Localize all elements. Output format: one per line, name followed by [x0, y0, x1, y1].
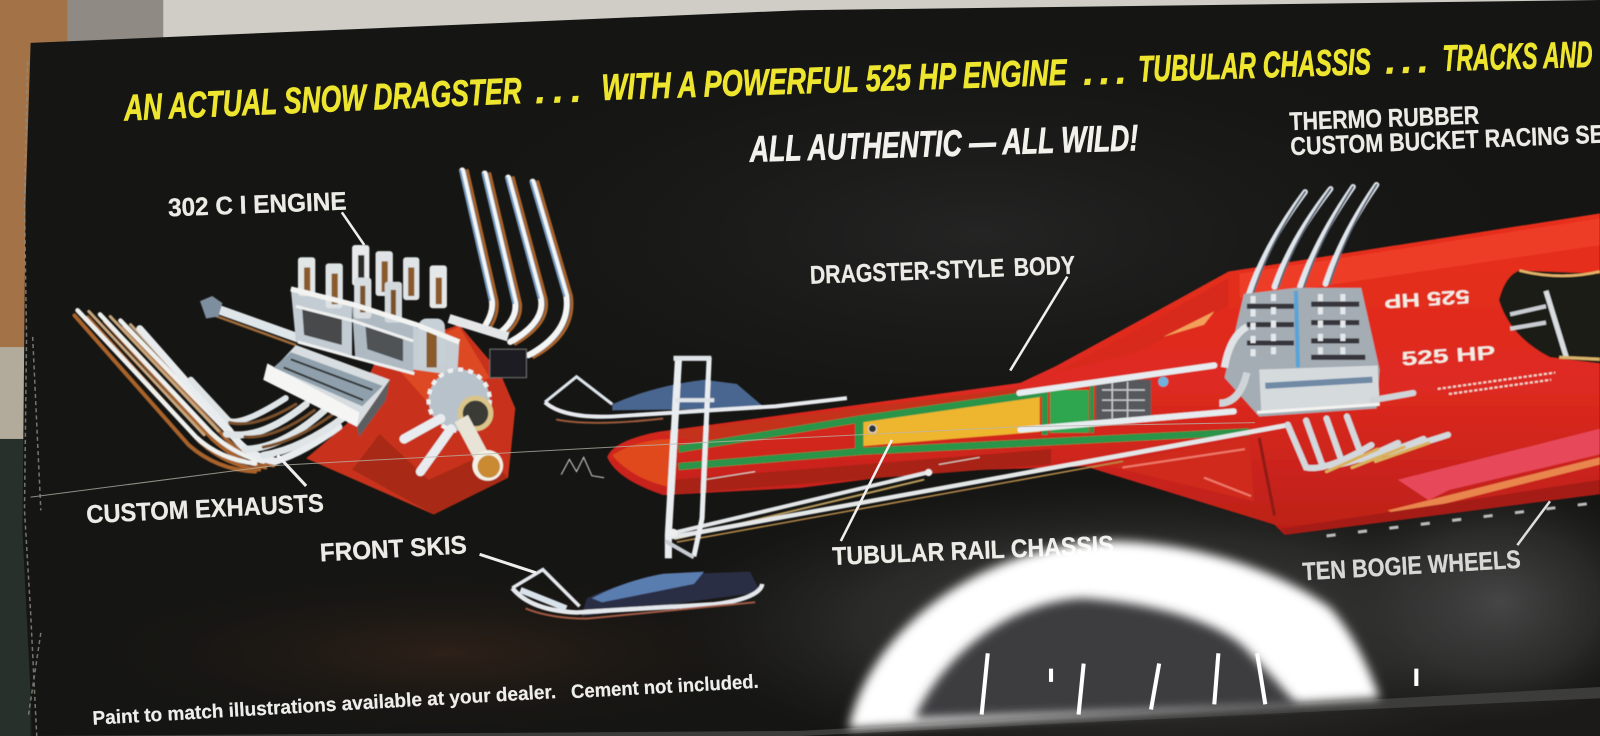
body decals	[1383, 285, 1555, 394]
pulley and accessories	[404, 370, 503, 481]
rear ski	[545, 377, 847, 423]
cockpit	[1499, 271, 1600, 363]
yellow deck	[863, 395, 1040, 446]
left edge creases	[24, 61, 41, 736]
label: chassis	[832, 440, 1114, 571]
label: engine: 302 C I ENGINE	[168, 188, 347, 222]
body decals: 525 HP	[1401, 342, 1496, 370]
headline yellow: . . .	[1385, 39, 1429, 81]
footnote	[92, 671, 759, 730]
bottom edge of the box	[33, 687, 1600, 736]
label: exhausts: CUSTOM EXHAUSTS	[86, 490, 324, 529]
front axle struts	[665, 357, 714, 558]
label: seat: THERMO RUBBER	[1289, 102, 1480, 136]
dragster engine	[1219, 185, 1380, 416]
illustration: dragster body	[512, 185, 1600, 619]
footnote: Paint to match illustrations available at your dealer.	[92, 681, 557, 730]
intake rods	[200, 296, 527, 378]
label: chassis: TUBULAR RAIL CHASSIS	[832, 531, 1114, 571]
glare on plastic wrap	[849, 541, 1416, 729]
upper exhaust pipes	[460, 170, 572, 357]
chrome side pipes	[1019, 365, 1234, 430]
subheading: ALL AUTHENTIC — ALL WILD!	[748, 117, 1139, 170]
illustration: engine assembly	[74, 170, 572, 514]
wrap seam line	[31, 423, 1255, 497]
label: skis	[319, 531, 536, 573]
carburettor stacks	[291, 245, 459, 376]
headline yellow: AN ACTUAL SNOW DRAGSTER	[122, 70, 523, 128]
nose scuffs	[561, 457, 980, 480]
headline yellow: . . .	[535, 69, 582, 111]
bogie wheels	[1327, 502, 1600, 536]
dragster headers	[1288, 393, 1448, 472]
headline yellow: . . .	[1083, 50, 1127, 93]
gauge panel	[1096, 377, 1168, 421]
label: skis: FRONT SKIS	[319, 531, 467, 567]
label: engine	[168, 188, 364, 245]
label: bogie wheels	[1302, 501, 1550, 586]
engine block	[306, 325, 515, 514]
label: body: DRAGSTER-STYLE BODY	[809, 252, 1076, 290]
left exhaust bundle	[74, 310, 345, 472]
footnote: Cement not included.	[570, 671, 759, 703]
headline yellow	[122, 34, 1593, 128]
label: exhausts	[86, 455, 324, 529]
headline yellow: TUBULAR CHASSIS	[1138, 41, 1372, 90]
lower panels	[1101, 438, 1254, 501]
front ski	[512, 570, 762, 619]
green chassis rails	[679, 386, 1249, 467]
label: bogie wheels: TEN BOGIE WHEELS	[1302, 546, 1521, 586]
headline yellow: WITH A POWERFUL 525 HP ENGINE	[601, 52, 1068, 108]
nose shading	[612, 439, 673, 488]
rocker cover	[263, 345, 390, 437]
hull	[607, 213, 1600, 535]
main tube rails	[673, 426, 1285, 542]
body decals: 525 HP	[1383, 285, 1470, 312]
label: body	[809, 252, 1076, 371]
upper cowl highlight	[1055, 278, 1229, 373]
